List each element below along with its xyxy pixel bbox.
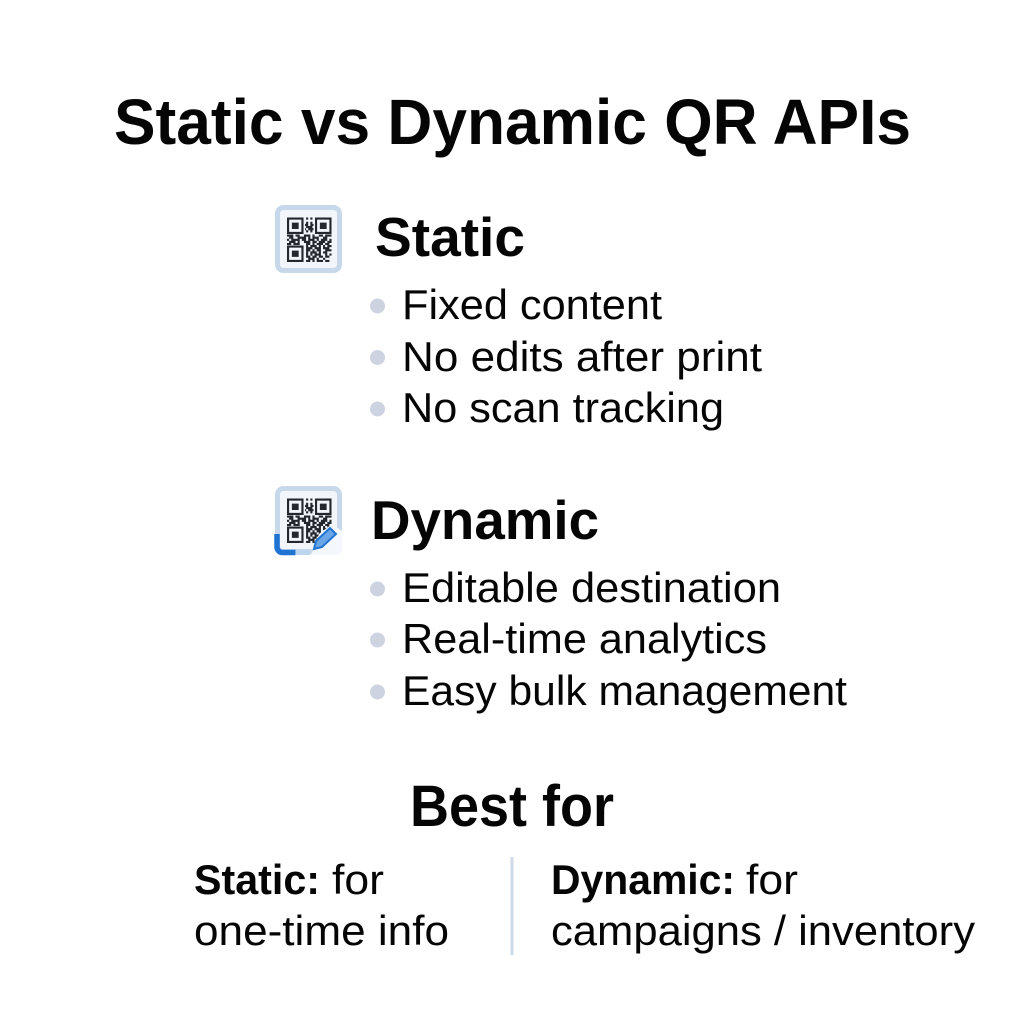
heading: best for: Best for xyxy=(410,774,614,839)
list: static features xyxy=(370,281,762,431)
list: static features: No scan tracking xyxy=(402,384,724,431)
list: dynamic features xyxy=(370,564,847,714)
list: static features: Fixed content xyxy=(402,281,662,328)
heading: static: Static xyxy=(375,206,525,268)
list: dynamic features: Easy bulk management xyxy=(402,667,847,714)
panel: static xyxy=(278,206,762,431)
title: Static vs Dynamic QR APIs xyxy=(114,86,911,158)
text: static best use: Static: xyxy=(194,856,320,903)
panel: dynamic xyxy=(277,488,847,714)
list: dynamic features: Editable destination xyxy=(402,564,781,611)
icon: dynamic QR code with pencil xyxy=(277,488,342,555)
text: static best use: for xyxy=(332,856,384,903)
text: static best use xyxy=(194,856,449,954)
list: static features: No edits after print xyxy=(402,333,762,380)
list: dynamic features: Real-time analytics xyxy=(402,615,767,662)
text: dynamic best use xyxy=(551,856,975,954)
text: static best use: one-time info xyxy=(194,907,449,954)
text: dynamic best use: Dynamic: xyxy=(551,856,735,903)
text: dynamic best use: campaigns / inventory xyxy=(551,907,975,954)
heading: dynamic: Dynamic xyxy=(371,489,599,551)
panel: best for xyxy=(194,774,975,955)
text: dynamic best use: for xyxy=(746,856,798,903)
icon: static QR code xyxy=(278,208,340,270)
